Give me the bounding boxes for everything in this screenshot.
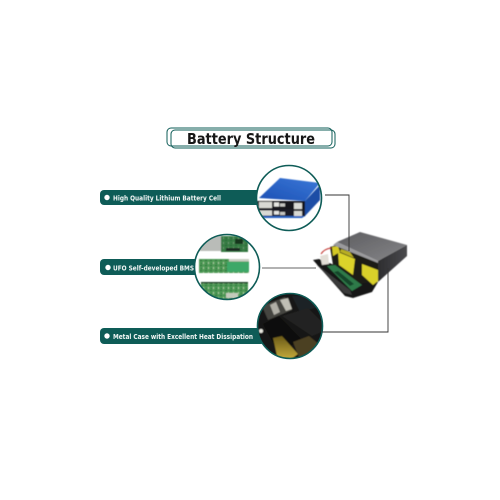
battery product image [313, 232, 407, 298]
label bar: metal case: Metal Case with Excellent Heat Dissipation [113, 332, 253, 341]
connector: BMS to battery [262, 267, 316, 269]
case side [378, 245, 407, 282]
yellow rear block [332, 246, 340, 256]
tray rim [316, 264, 352, 295]
icon: battery cell circle [256, 165, 322, 231]
case lid top [337, 232, 407, 261]
yellow cell block [338, 252, 355, 275]
label bar: battery cell: High Quality Lithium Battery Cell [113, 193, 221, 202]
circuit board [327, 265, 362, 291]
lid front edge [333, 242, 378, 263]
yellow cell block top [340, 249, 354, 258]
red wire [321, 248, 331, 254]
label bar: BMS: UFO Self-developed BMS [113, 263, 194, 272]
yellow cell block right [362, 264, 378, 285]
white connector [320, 254, 329, 265]
connector: cell to battery [325, 195, 349, 251]
rear dark frame [330, 244, 378, 284]
icon: metal case circle [257, 293, 323, 360]
label bar: battery cell [100, 190, 265, 205]
title: Battery Structure [187, 130, 315, 148]
icon: BMS circuit boards circle [194, 234, 260, 300]
label bar: BMS [100, 259, 205, 275]
connector: case to battery [322, 268, 388, 332]
label bar: metal case [100, 328, 265, 344]
tray [313, 259, 378, 298]
